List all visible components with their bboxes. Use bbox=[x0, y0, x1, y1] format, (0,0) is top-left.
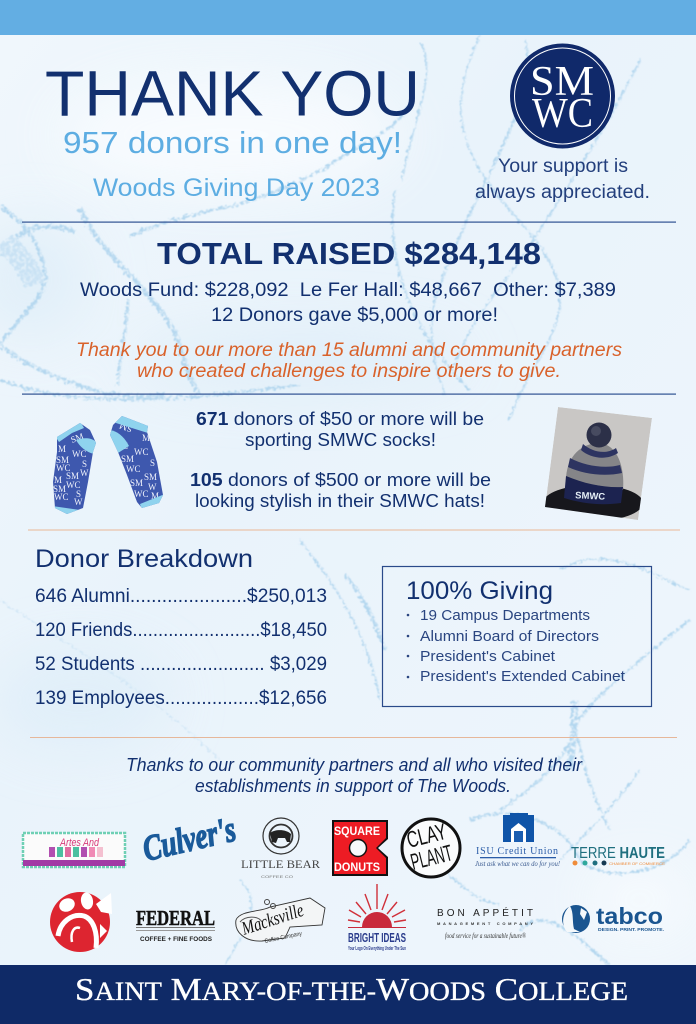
panel: 100% giving bbox=[382, 566, 652, 706]
logo: Square Donuts bbox=[332, 820, 388, 876]
icon: SMWC socks: M bbox=[54, 475, 62, 485]
icon: SMWC seal: SM bbox=[530, 59, 594, 105]
logo: Bon Appetit bbox=[437, 906, 533, 940]
logo: Macksville Coffee Company: Macksville bbox=[238, 900, 306, 940]
list: donor breakdown rows: 120 Friends.........................$18,450 bbox=[35, 619, 327, 641]
text: hats incentive bbox=[190, 469, 491, 511]
text: community thanks bbox=[126, 755, 583, 796]
logo: Little Bear Coffee: COFFEE CO bbox=[261, 874, 293, 879]
icon: SMWC socks: SM bbox=[121, 454, 134, 464]
panel: 100% giving: Alumni Board of Directors bbox=[420, 628, 599, 645]
footer college name: SAINT MARY-OF-THE- WOODS COLLEGE bbox=[75, 971, 628, 1007]
text: support note: always appreciated. bbox=[475, 182, 650, 203]
divider lines bbox=[22, 222, 680, 738]
logo: Bright Ideas bbox=[348, 884, 406, 952]
logo: Square Donuts: SQUARE bbox=[334, 826, 380, 838]
icon: SMWC socks: S bbox=[82, 459, 87, 469]
icon: SMWC socks: S bbox=[150, 458, 155, 468]
logo: Tabco bbox=[562, 903, 664, 933]
icon: SMWC seal: WC bbox=[532, 91, 593, 137]
logo: Artes And bbox=[23, 833, 125, 867]
icon: SMWC seal bbox=[510, 44, 615, 148]
logo: Terre Haute Chamber of Commerce: CHAMBER OF COMMERCE bbox=[609, 861, 665, 866]
text: hats incentive: 105 donors of $500 or more will be bbox=[190, 469, 491, 490]
panel: 100% giving: President's Cabinet bbox=[420, 648, 556, 665]
logo: Bon Appetit: food service for a sustainable future® bbox=[445, 932, 527, 940]
icon: SMWC socks: SM bbox=[144, 472, 157, 482]
logo: Bright Ideas: BRIGHT IDEAS bbox=[348, 930, 406, 945]
logo: Clay Plant bbox=[402, 818, 460, 877]
logo: Clay Plant: CLAY bbox=[404, 818, 449, 853]
subtitle: event name: Woods Giving Day 2023 bbox=[93, 174, 380, 202]
logo: Artes And: Artes And bbox=[59, 837, 100, 849]
icon: SMWC socks: W bbox=[74, 497, 83, 507]
text: hats incentive: looking stylish in their SMWC hats! bbox=[195, 490, 485, 511]
logo: Bright Ideas: Your Logo On Everything Under The Sun bbox=[348, 946, 406, 952]
text: support note: Your support is bbox=[498, 156, 628, 177]
text: support note bbox=[475, 156, 650, 203]
list: donor breakdown rows: 52 Students ........................ $3,029 bbox=[35, 653, 327, 675]
panel: 100% giving: 100% Giving bbox=[406, 577, 553, 605]
title: THANK YOU bbox=[45, 58, 420, 130]
icon: SMWC socks: M bbox=[58, 444, 66, 454]
icon: SMWC socks: SM bbox=[69, 431, 85, 445]
logo: Chick-fil-A bbox=[50, 892, 112, 952]
total raised heading: TOTAL RAISED $284,148 bbox=[157, 236, 541, 271]
icon: SMWC socks: WC bbox=[54, 492, 68, 502]
list: donor breakdown rows bbox=[35, 585, 327, 709]
text: fund breakdown bbox=[80, 280, 616, 326]
logo: Culver's: Culver's bbox=[139, 809, 239, 869]
text: community thanks: Thanks to our community partners and all who visited their bbox=[126, 755, 583, 775]
photo: SMWC hat bbox=[543, 407, 652, 521]
icon: SMWC socks: SM bbox=[66, 471, 79, 481]
icon: SMWC socks: SM bbox=[53, 484, 66, 494]
logo: Little Bear Coffee: LITTLE BEAR bbox=[241, 857, 320, 871]
logo: Square Donuts: DONUTS bbox=[334, 862, 380, 874]
footer band bbox=[0, 965, 696, 1024]
icon: SMWC socks: SM bbox=[56, 455, 69, 465]
icon: SMWC socks: M bbox=[142, 433, 150, 443]
icon: SMWC socks: W bbox=[148, 482, 157, 492]
logo: Macksville Coffee Company: Coffee Company bbox=[264, 931, 303, 945]
icon: SMWC socks: WC bbox=[134, 447, 148, 457]
text: partner challenge note: Thank you to our more than 15 alumni and community partners bbox=[76, 340, 623, 361]
icon: SMWC socks: WC bbox=[134, 489, 148, 499]
logo: ISU Credit Union: ISU Credit Union bbox=[476, 846, 558, 857]
logo: Bon Appetit: MANAGEMENT COMPANY bbox=[437, 921, 533, 926]
logo: Terre Haute Chamber of Commerce: TERRE HAUTE bbox=[571, 845, 665, 862]
logo: Federal Coffee: FEDERAL bbox=[136, 906, 215, 930]
text: fund breakdown: Woods Fund: $228,092 Le Fer Hall: $48,667 Other: $7,389 bbox=[80, 280, 616, 301]
logo: Clay Plant: PLANT bbox=[408, 839, 455, 875]
icon: SMWC socks: S bbox=[76, 489, 81, 499]
list: donor breakdown rows: 139 Employees..................$12,656 bbox=[35, 687, 327, 709]
text: socks incentive bbox=[196, 408, 484, 450]
text: community thanks: establishments in support of The Woods. bbox=[195, 776, 511, 796]
icon: SMWC socks: WC bbox=[66, 480, 80, 490]
icon: SMWC socks: WC bbox=[56, 463, 70, 473]
icon: SMWC socks: SM bbox=[118, 421, 134, 434]
icon: SMWC socks: W bbox=[80, 468, 89, 478]
icon: SMWC socks: WC bbox=[126, 464, 140, 474]
photo: SMWC hat: SMWC bbox=[575, 490, 606, 503]
logo: Little Bear Coffee bbox=[241, 818, 320, 879]
list: donor breakdown rows: 646 Alumni......................$250,013 bbox=[35, 585, 327, 607]
panel: 100% giving: President's Extended Cabinet bbox=[420, 668, 626, 685]
icon: SMWC socks: WC bbox=[72, 449, 86, 459]
subtitle: donor count: 957 donors in one day! bbox=[63, 125, 402, 160]
heading: donor breakdown: Donor Breakdown bbox=[35, 545, 253, 573]
logo: Federal Coffee: COFFEE + FINE FOODS bbox=[140, 937, 212, 943]
icon: SMWC socks: C bbox=[122, 441, 128, 451]
text: partner challenge note: who created challenges to inspire others to give. bbox=[137, 361, 561, 382]
logo: Bon Appetit: BON APPÉTIT bbox=[437, 906, 533, 919]
text: partner challenge note bbox=[76, 340, 623, 382]
logo: Tabco: tabco bbox=[596, 903, 663, 929]
logo: Federal Coffee bbox=[136, 906, 215, 943]
logo: Tabco: DESIGN. PRINT. PROMOTE. bbox=[598, 927, 664, 932]
top bar bbox=[0, 0, 696, 35]
logo: ISU Credit Union: Just ask what we can do for you! bbox=[475, 860, 561, 868]
panel: 100% giving: 19 Campus Departments bbox=[420, 607, 590, 624]
text: socks incentive: sporting SMWC socks! bbox=[245, 429, 436, 450]
icon: SMWC socks bbox=[53, 416, 163, 514]
icon: SMWC socks: SM bbox=[130, 478, 143, 488]
logo: ISU Credit Union bbox=[475, 813, 561, 868]
text: socks incentive: 671 donors of $50 or more will be bbox=[196, 408, 484, 429]
icon: SMWC socks: M bbox=[151, 491, 159, 501]
text: fund breakdown: 12 Donors gave $5,000 or more! bbox=[211, 305, 498, 326]
